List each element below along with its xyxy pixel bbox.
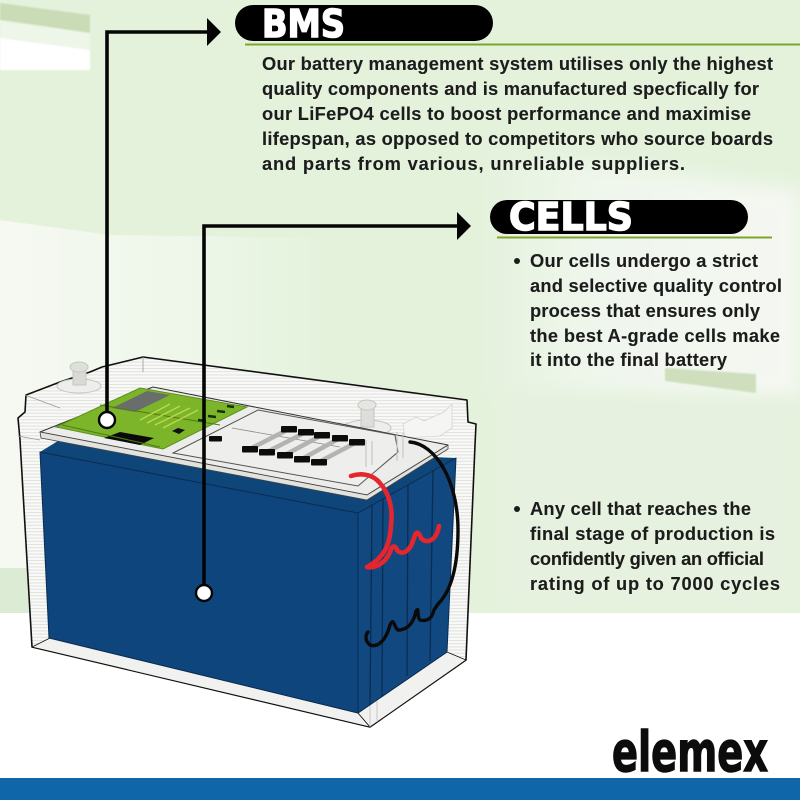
cells rating bullet: final stage of production is [530,523,775,544]
footer bar [0,778,800,800]
cells quality control bullet: it into the final battery [530,349,728,370]
cells quality control bullet [514,250,782,370]
cells quality control bullet: and selective quality control [530,275,782,296]
BMS description: and parts from various, unreliable suppliers. [262,153,685,174]
arrow: BMS pointer [99,18,221,428]
cells quality control bullet: the best A-grade cells make [530,325,780,346]
cells quality control bullet: Our cells undergo a strict [530,250,758,271]
cells rating bullet: confidently given an official [530,548,764,569]
BMS description [262,53,773,174]
cells rating bullet [514,498,780,594]
BMS description: quality components and is manufactured specfically for [262,78,759,99]
cells rating bullet: Any cell that reaches the [530,498,751,519]
BMS description: lifepspan, as opposed to competitors who source boards [262,128,773,149]
BMS heading [235,2,800,46]
BMS description: Our battery management system utilises only the highest [262,53,773,74]
terminal connector [403,404,452,438]
blue cell block [40,441,456,713]
battery case [18,357,476,727]
battery illustration [18,357,476,727]
cells rating bullet: rating of up to 7000 cycles [530,573,780,594]
BMS description: our LiFePO4 cells to boost performance and maximise [262,103,751,124]
CELLS heading: CELLS [509,195,633,239]
BMS heading: BMS [262,2,345,46]
black cable [366,442,458,646]
red cable [351,474,439,567]
terminal left [57,362,101,393]
CELLS heading [490,195,772,239]
terminal right [343,400,391,436]
cover panel with contacts [173,410,403,486]
cover tray [40,387,448,500]
arrow: cells pointer [196,212,471,601]
BMS circuit board [56,388,247,449]
cells quality control bullet: process that ensures only [530,300,761,321]
